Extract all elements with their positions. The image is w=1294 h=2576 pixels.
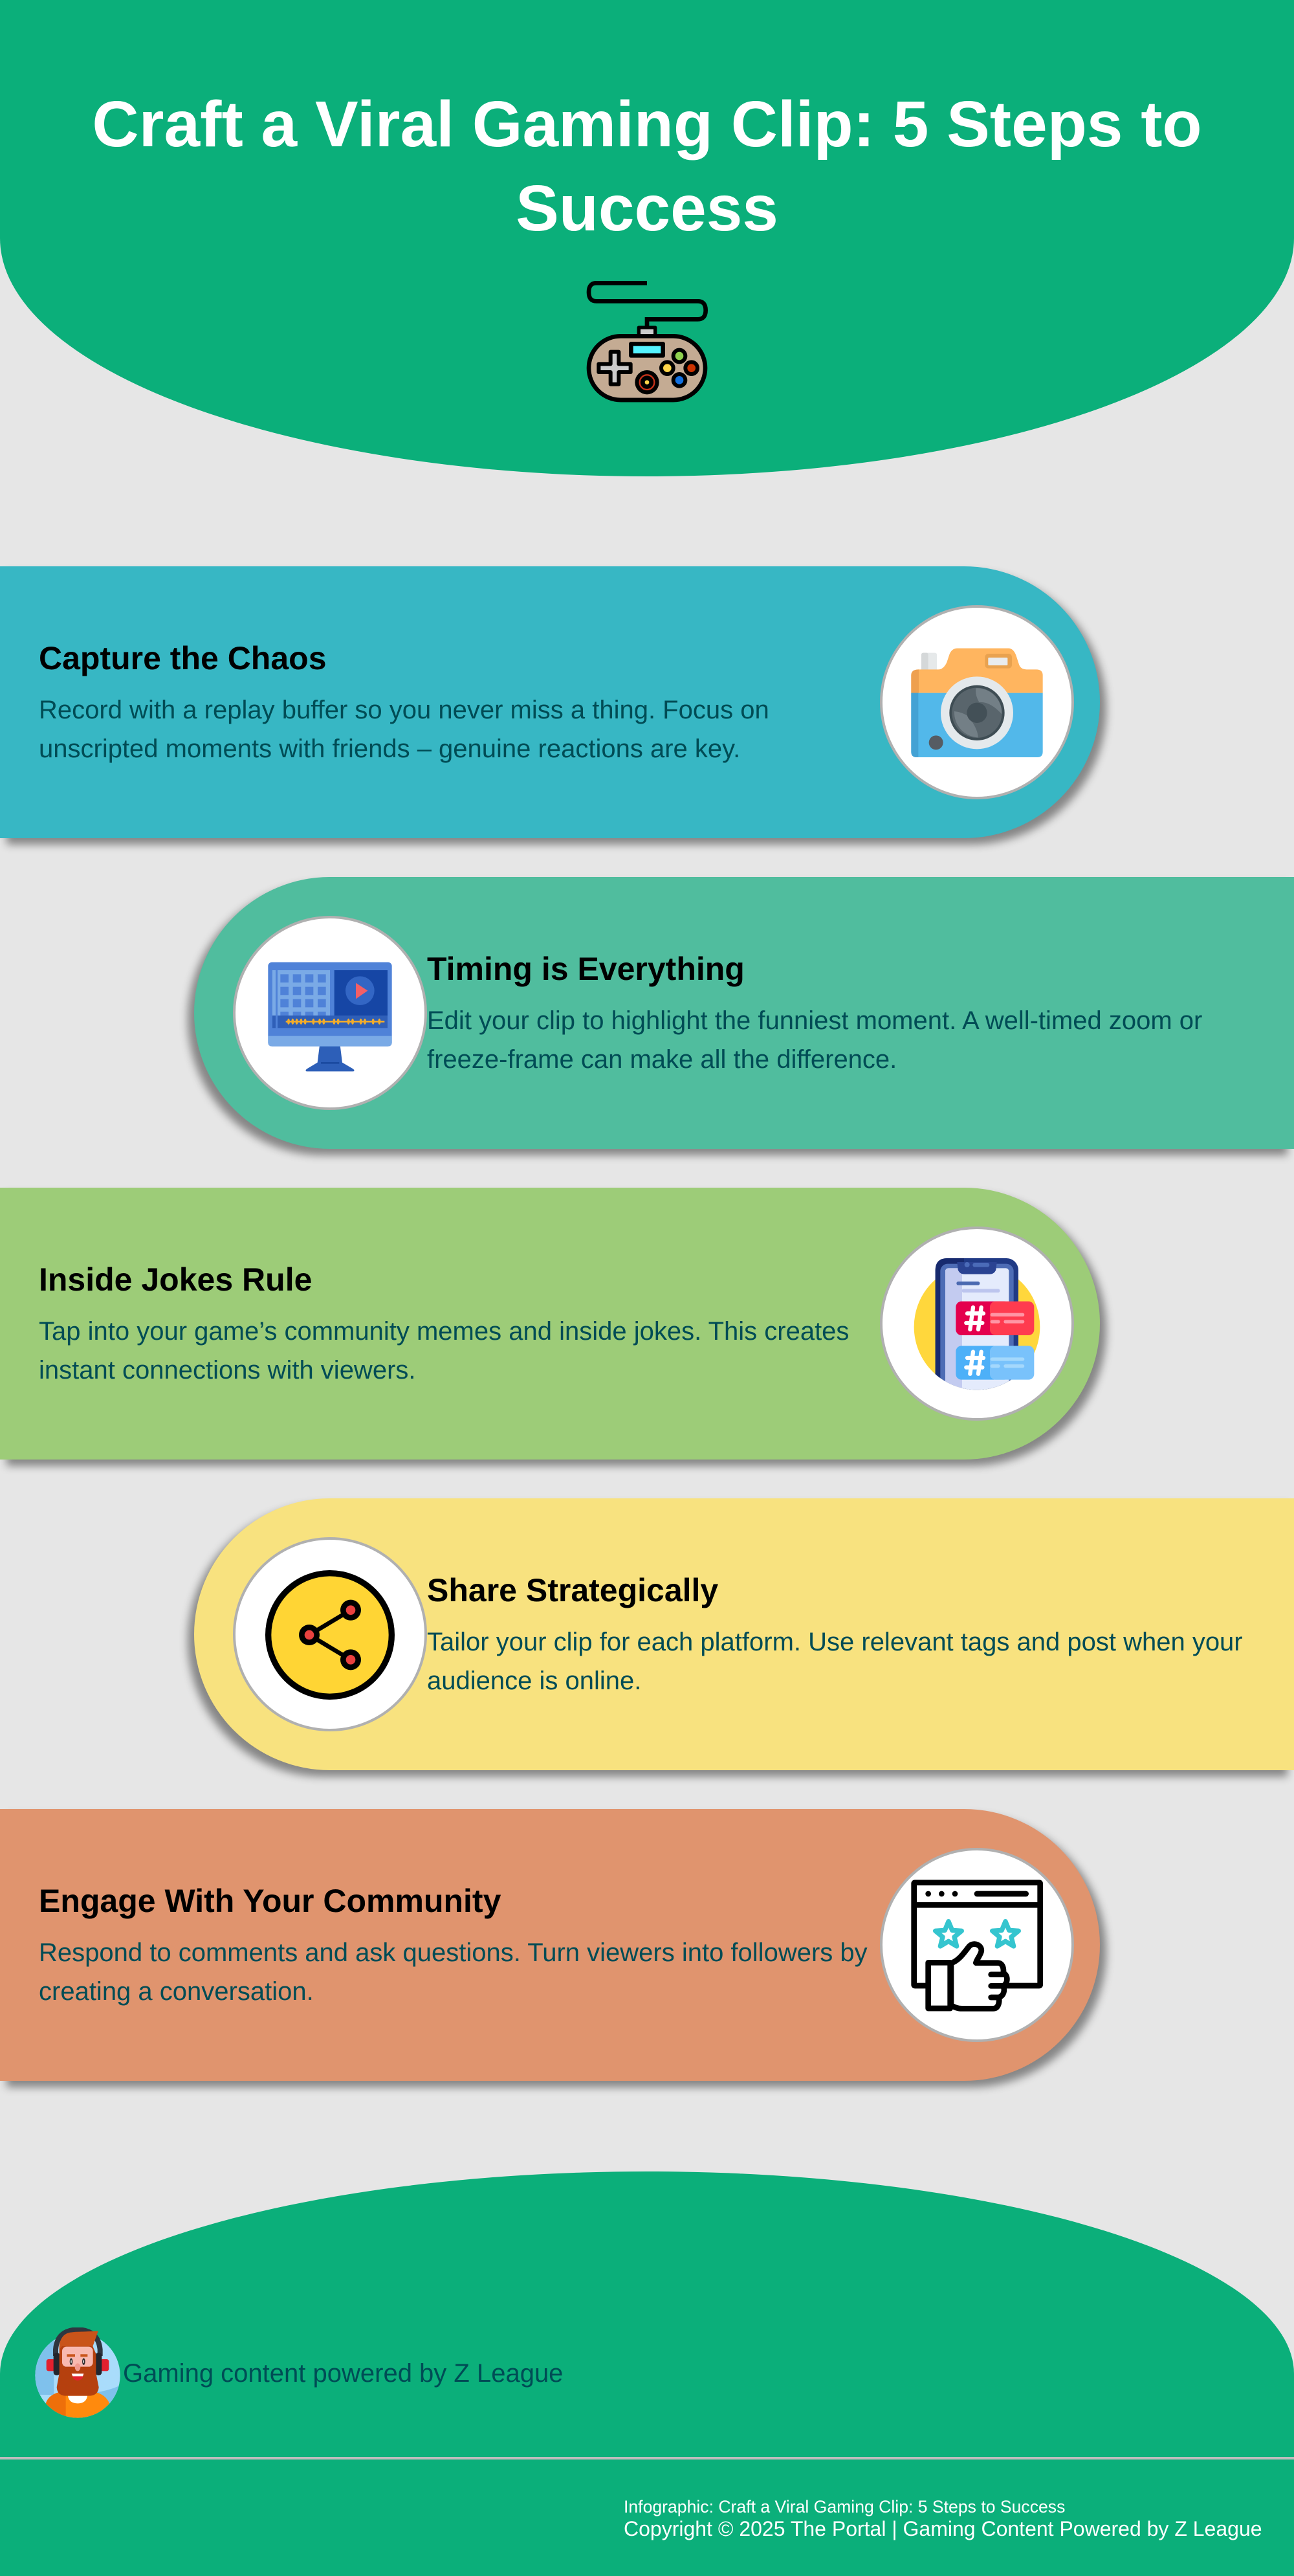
step 1 text: Record with a replay buffer so you never miss a thing. Focus on (39, 696, 769, 724)
panel: step 3 inside jokes rule (0, 1188, 1100, 1460)
step 2 text (427, 951, 1202, 1074)
footer credits (624, 2497, 1262, 2540)
step 5 text: Engage With Your Community (39, 1883, 501, 1919)
icon: game controller (586, 281, 708, 403)
icon: share (233, 1537, 427, 1731)
title: Success (516, 172, 778, 245)
header banner (0, 0, 1294, 476)
step 4 text: Share Strategically (427, 1572, 718, 1608)
icon: phone with hashtags (880, 1227, 1074, 1421)
title (92, 88, 1202, 245)
title: Craft a Viral Gaming Clip: 5 Steps to (92, 88, 1202, 161)
step 4 text (427, 1572, 1243, 1695)
step 1 text: Capture the Chaos (39, 640, 327, 676)
step 3 text: Inside Jokes Rule (39, 1261, 312, 1298)
footer credits: Infographic: Craft a Viral Gaming Clip: 5 Steps to Success (624, 2497, 1065, 2516)
step 5 text (39, 1883, 868, 2006)
step 4 text: audience is online. (427, 1667, 641, 1695)
step 1 text: unscripted moments with friends – genuine reactions are key. (39, 735, 740, 763)
step 3 text: instant connections with viewers. (39, 1356, 415, 1384)
step 2 text: Timing is Everything (427, 951, 745, 987)
panel: step 2 timing is everything (194, 877, 1294, 1149)
step 5 text: Respond to comments and ask questions. Turn viewers into followers by (39, 1938, 868, 1967)
step 2 text: Edit your clip to highlight the funniest moment. A well-timed zoom or (427, 1006, 1202, 1035)
step 2 text: freeze-frame can make all the difference. (427, 1045, 897, 1074)
step 3 text (39, 1261, 849, 1384)
footer tagline: Gaming content powered by Z League (123, 2359, 563, 2388)
footer credits: Copyright © 2025 The Portal | Gaming Content Powered by Z League (624, 2517, 1262, 2540)
icon: avatar with headphones (35, 2327, 120, 2418)
icon: camera (880, 605, 1074, 799)
icon: video editor monitor (233, 916, 427, 1110)
step 5 text: creating a conversation. (39, 1977, 314, 2006)
panel: step 4 share strategically (194, 1498, 1294, 1770)
step 1 text (39, 640, 769, 763)
step 4 text: Tailor your clip for each platform. Use relevant tags and post when your (427, 1628, 1243, 1656)
icon: window with thumbs up (880, 1848, 1074, 2042)
footer banner (0, 2171, 1294, 2576)
panel: step 1 capture the chaos (0, 566, 1100, 838)
panel: step 5 engage with your community (0, 1809, 1100, 2081)
step 3 text: Tap into your game’s community memes and inside jokes. This creates (39, 1317, 849, 1346)
